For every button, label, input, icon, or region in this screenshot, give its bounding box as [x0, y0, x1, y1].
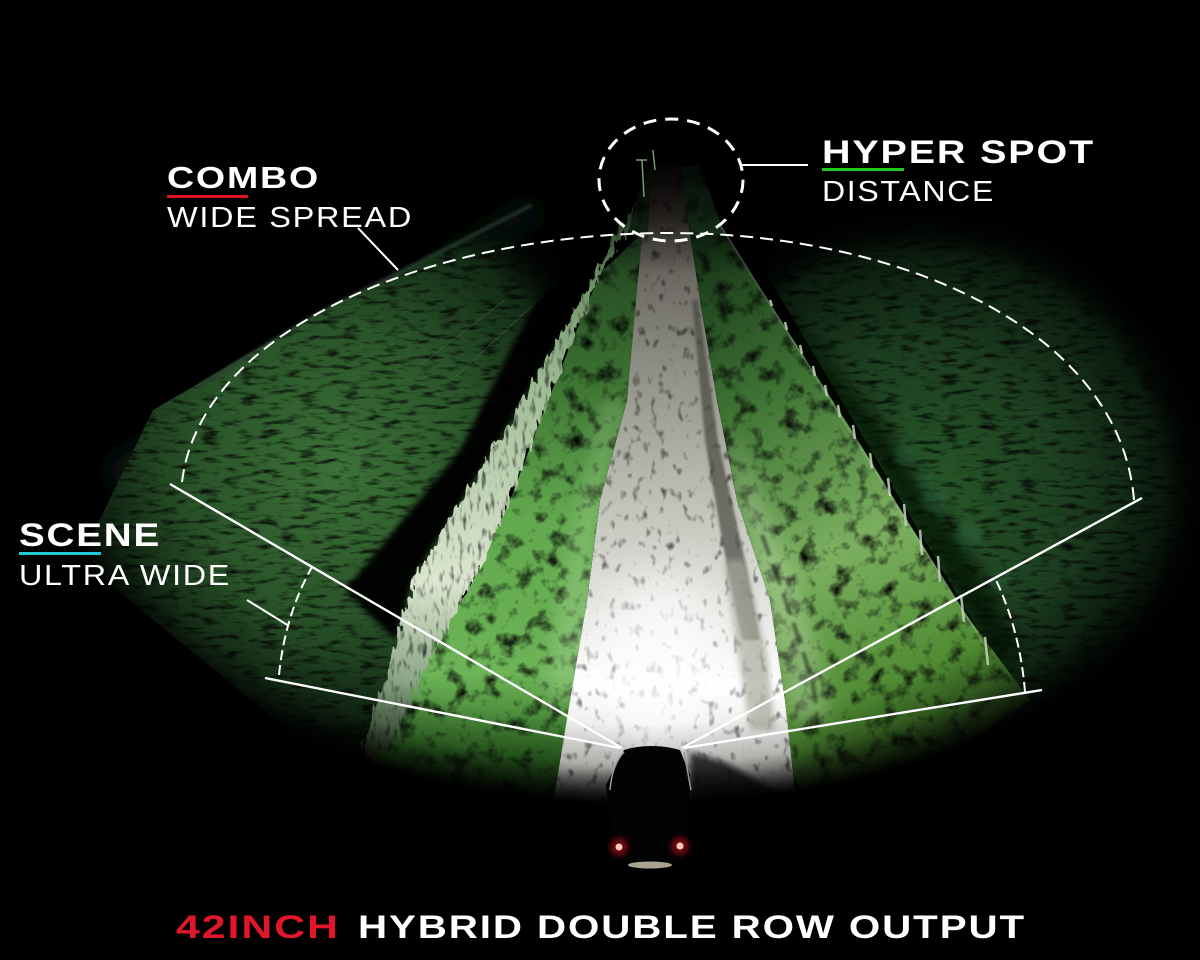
- footer white text: HYBRID DOUBLE ROW OUTPUT: [358, 909, 1026, 945]
- hyper spot underline: [822, 168, 904, 171]
- scene leader: [247, 600, 289, 626]
- wet wheel rut: [692, 300, 760, 640]
- scene heading: SCENE: [19, 517, 161, 553]
- fence posts: [770, 300, 988, 665]
- glow on right verge near road: [730, 430, 830, 720]
- headlight hot spot: [598, 575, 722, 755]
- beam lines: [170, 484, 1142, 748]
- right grass verge: [688, 235, 1030, 810]
- combo underline: [167, 195, 248, 198]
- label: scene: [19, 517, 231, 592]
- hyper spot leader: [742, 164, 808, 166]
- hyper spot dashed circle: [599, 119, 743, 241]
- distant right verge: [680, 165, 725, 235]
- tyre ruts on right verge: [762, 535, 817, 760]
- distant fade to darkness: [596, 165, 738, 269]
- far track beside left field: [200, 205, 532, 385]
- hyper spot subtitle: DISTANCE: [822, 176, 995, 208]
- scene right dashed arc: [995, 578, 1025, 692]
- signpost: [636, 150, 655, 197]
- shadow beside fence: [794, 320, 1022, 670]
- faint tyre lines: [420, 295, 544, 380]
- dirt road: [552, 165, 797, 810]
- left crop field: [88, 234, 570, 738]
- combo dashed arc: [182, 233, 1134, 500]
- left tail light glow: [610, 838, 628, 856]
- combo leader: [358, 228, 398, 270]
- right tail light: [676, 842, 684, 850]
- combo heading: COMBO: [167, 160, 320, 195]
- label: hyper spot: [822, 134, 1095, 208]
- combo subtitle: WIDE SPREAD: [167, 202, 413, 234]
- label: combo: [167, 160, 413, 234]
- left tail light: [616, 844, 622, 850]
- vehicle body: [606, 746, 690, 860]
- tree blobs past fence: [894, 444, 1010, 590]
- left pale bank: [365, 205, 639, 760]
- right crop field: [772, 232, 1184, 700]
- scene underline: [19, 552, 101, 555]
- distant left verge: [628, 169, 651, 235]
- shadow behind bank: [343, 290, 570, 641]
- lower puddle: [724, 560, 775, 730]
- right tail light glow: [671, 837, 689, 855]
- number plate light: [628, 862, 672, 868]
- left grass verge: [366, 236, 642, 792]
- scene subtitle: ULTRA WIDE: [19, 560, 231, 592]
- glow on left verge near road: [545, 400, 625, 700]
- vehicle: [606, 746, 691, 868]
- vehicle side pillars: [610, 752, 691, 790]
- shadow right of vehicle: [686, 748, 770, 797]
- footer title: [176, 909, 1026, 945]
- road scene photo: [80, 150, 1200, 810]
- footer red text: 42INCH: [176, 909, 340, 945]
- fence line: [720, 225, 986, 647]
- hyper spot heading: HYPER SPOT: [822, 134, 1095, 170]
- scene left dashed arc: [279, 567, 312, 675]
- far left dim field: [108, 201, 540, 488]
